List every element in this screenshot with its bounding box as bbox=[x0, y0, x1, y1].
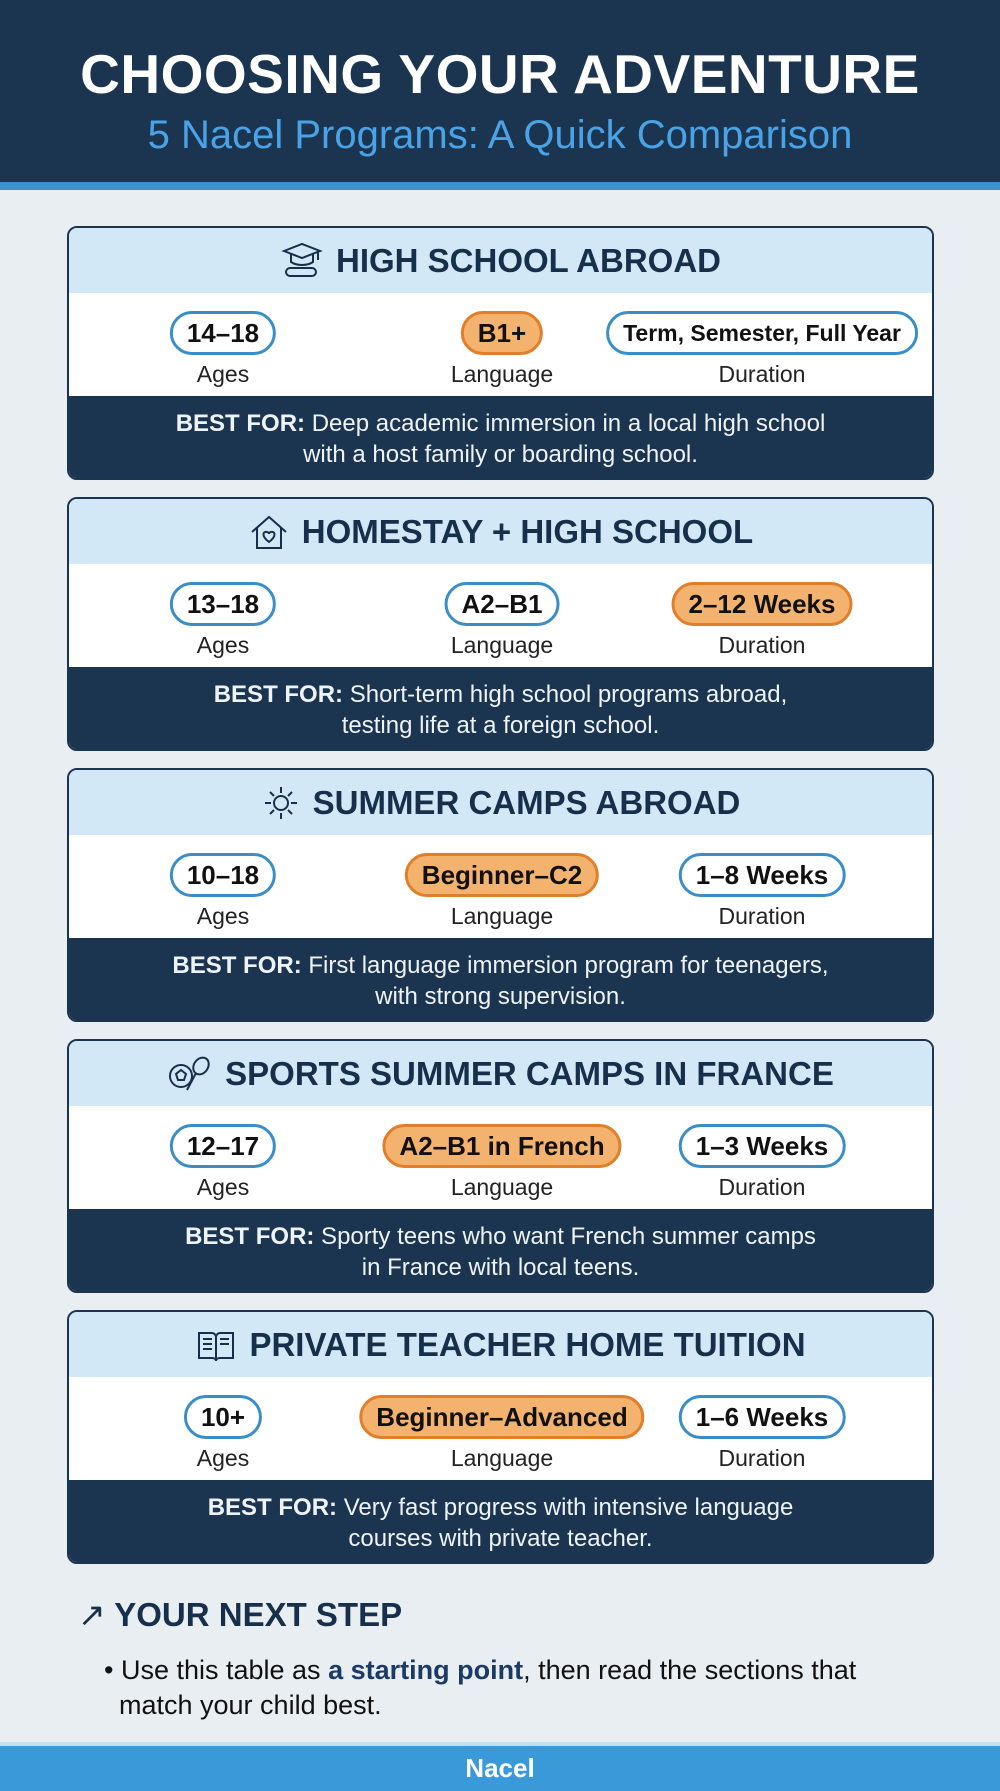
stats row: 2–12 Weeks bbox=[689, 589, 835, 619]
panel: sports summer camps in France bbox=[67, 1039, 934, 1293]
stats row: Ages bbox=[197, 632, 249, 658]
stats row: Ages bbox=[197, 361, 249, 387]
card heading: HIGH SCHOOL ABROAD bbox=[336, 242, 721, 278]
best for: BEST FOR: First language immersion program for teenagers, bbox=[172, 952, 829, 979]
panel: high school abroad bbox=[67, 226, 934, 480]
best for bbox=[69, 938, 932, 1024]
stats row: 13–18 bbox=[187, 589, 259, 619]
stats row: A2–B1 in French bbox=[399, 1131, 605, 1161]
next step text bbox=[104, 1655, 856, 1720]
stats row: A2–B1 bbox=[462, 589, 542, 619]
best for: courses with private teacher. bbox=[348, 1525, 653, 1552]
stats row bbox=[69, 1377, 932, 1480]
stats row: Beginner–C2 bbox=[422, 860, 582, 890]
stats row: Duration bbox=[719, 903, 805, 929]
panel: summer camps abroad bbox=[67, 768, 934, 1022]
stats row: 1–6 Weeks bbox=[696, 1402, 828, 1432]
best for bbox=[69, 667, 932, 753]
stats row: Language bbox=[451, 1174, 553, 1200]
stats row: Ages bbox=[197, 1174, 249, 1200]
best for: with a host family or boarding school. bbox=[303, 441, 698, 468]
best for: BEST FOR: Sporty teens who want French summer camps bbox=[185, 1223, 816, 1250]
footer bbox=[0, 1742, 1000, 1791]
stats row: 14–18 bbox=[187, 318, 259, 348]
next step text: • Use this table as a starting point, then read the sections that bbox=[104, 1655, 856, 1685]
stats row bbox=[69, 564, 932, 667]
stats row: Duration bbox=[719, 1445, 805, 1471]
stats row: Duration bbox=[719, 632, 805, 658]
best for: BEST FOR: Short-term high school programs abroad, bbox=[214, 681, 787, 708]
next step text: match your child best. bbox=[119, 1690, 382, 1720]
card heading bbox=[69, 770, 932, 835]
stats row: Term, Semester, Full Year bbox=[623, 320, 901, 346]
stats row: Duration bbox=[719, 361, 805, 387]
stats row bbox=[69, 835, 932, 938]
next step heading: ↗ YOUR NEXT STEP bbox=[78, 1596, 402, 1633]
header banner bbox=[0, 0, 1000, 190]
panel: homestay + high school bbox=[67, 497, 934, 751]
best for bbox=[69, 1480, 932, 1566]
card heading: HOMESTAY + HIGH SCHOOL bbox=[302, 512, 753, 550]
best for: testing life at a foreign school. bbox=[342, 712, 659, 739]
stats row: 10+ bbox=[201, 1402, 245, 1432]
best for: in France with local teens. bbox=[362, 1254, 639, 1281]
stats row: Language bbox=[451, 361, 553, 387]
stats row: Ages bbox=[197, 1445, 249, 1471]
stats row: 12–17 bbox=[187, 1131, 259, 1161]
stats row bbox=[69, 293, 932, 396]
panel: private teacher home tuition bbox=[67, 1310, 934, 1564]
stats row: Language bbox=[451, 1445, 553, 1471]
title: CHOOSING YOUR ADVENTURE bbox=[80, 43, 920, 105]
card heading bbox=[69, 228, 932, 293]
best for: BEST FOR: Very fast progress with intensive language bbox=[208, 1494, 793, 1521]
best for: with strong supervision. bbox=[375, 983, 626, 1010]
best for bbox=[69, 1209, 932, 1295]
stats row: Ages bbox=[197, 903, 249, 929]
stats row: Language bbox=[451, 632, 553, 658]
next step section bbox=[78, 1596, 856, 1720]
stats row: Language bbox=[451, 903, 553, 929]
stats row: 1–8 Weeks bbox=[696, 860, 828, 890]
card heading bbox=[69, 1041, 932, 1106]
stats row: Duration bbox=[719, 1174, 805, 1200]
card heading: SPORTS SUMMER CAMPS IN FRANCE bbox=[225, 1054, 834, 1092]
footer: Nacel bbox=[465, 1753, 535, 1783]
card heading: PRIVATE TEACHER HOME TUITION bbox=[249, 1326, 806, 1362]
card heading: SUMMER CAMPS ABROAD bbox=[313, 784, 740, 820]
stats row: B1+ bbox=[478, 318, 526, 348]
stats row: 1–3 Weeks bbox=[696, 1131, 828, 1161]
stats row: 10–18 bbox=[187, 860, 259, 890]
card heading bbox=[69, 1312, 932, 1377]
subtitle: 5 Nacel Programs: A Quick Comparison bbox=[148, 113, 852, 157]
stats row bbox=[69, 1106, 932, 1209]
best for: BEST FOR: Deep academic immersion in a local high school bbox=[176, 410, 825, 437]
best for bbox=[69, 396, 932, 482]
stats row: Beginner–Advanced bbox=[376, 1402, 628, 1432]
card heading bbox=[69, 499, 932, 564]
